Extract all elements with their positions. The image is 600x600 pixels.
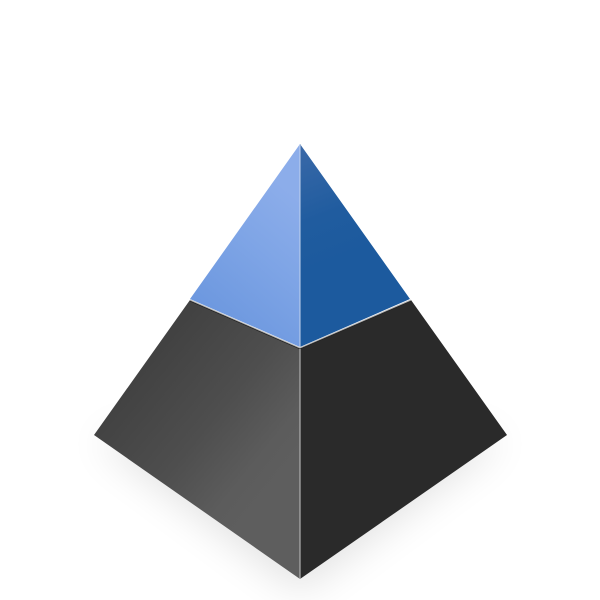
upper left face: light blue	[190, 144, 300, 347]
lower right face: near black	[300, 300, 507, 579]
ground shadow	[96, 400, 504, 592]
lower left face: dark grey	[94, 300, 300, 579]
highlight edges	[190, 145, 411, 579]
upper right face: dark blue	[300, 144, 410, 347]
